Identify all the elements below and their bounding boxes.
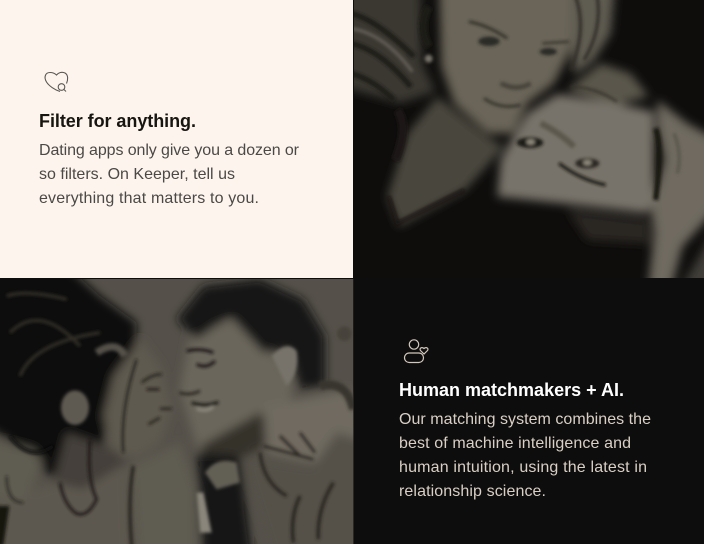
body text: filter for anything: Dating apps only give you a dozen or (39, 142, 300, 159)
body text: human matchmakers + AI: relationship science. (399, 483, 546, 500)
body text: human matchmakers + AI: Our matching system combines the (399, 411, 651, 428)
body text: human matchmakers + AI (399, 411, 651, 500)
icon: person with heart (404, 340, 428, 362)
photo: smiling couple, bottom left (0, 266, 370, 544)
icon: heart with magnifier (45, 72, 68, 92)
photo: woman embracing man, top right (354, 0, 704, 278)
panel: filter for anything (0, 0, 353, 278)
body text: human matchmakers + AI: best of machine intelligence and (399, 435, 631, 452)
body text: filter for anything (39, 142, 300, 207)
body text: filter for anything: everything that matters to you. (39, 190, 259, 207)
heading: human matchmakers + AI: Human matchmakers + AI. (399, 380, 624, 400)
body text: human matchmakers + AI: human intuition, using the latest in (399, 459, 647, 476)
body text: filter for anything: so filters. On Keeper, tell us (39, 166, 235, 183)
panel: human matchmakers + AI (354, 279, 704, 544)
heading: filter for anything: Filter for anything. (39, 111, 196, 131)
